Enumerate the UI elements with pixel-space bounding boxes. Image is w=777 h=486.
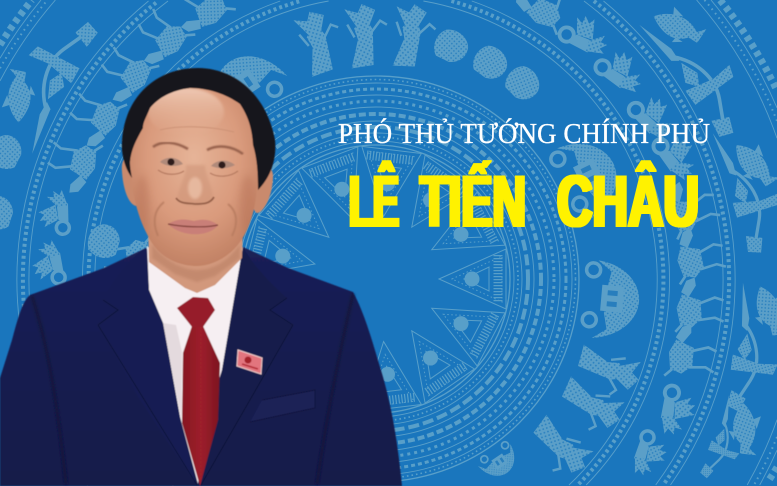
right lapel <box>201 247 293 486</box>
name: CHÂU <box>557 162 699 242</box>
hair <box>122 68 275 190</box>
eyebrows <box>153 143 243 154</box>
mouth <box>168 219 218 234</box>
breast pocket <box>250 390 315 422</box>
left eye <box>160 158 183 166</box>
subtitle: PHÓ THỦ TƯỚNG CHÍNH PHỦ <box>338 117 710 150</box>
drum inner concentric rings <box>242 75 580 481</box>
collar shading <box>163 323 182 417</box>
tie knot <box>177 297 215 327</box>
right cheek shadow <box>240 178 254 228</box>
shirt <box>147 246 243 484</box>
necktie <box>177 297 220 486</box>
drum inner figures: boats and winged dancers <box>86 2 645 485</box>
name <box>349 162 699 242</box>
nose highlight <box>188 177 202 199</box>
left lapel <box>98 248 197 486</box>
facial features <box>153 127 243 236</box>
neck <box>148 228 243 293</box>
right eye <box>211 161 235 168</box>
lapel outline shading <box>98 298 293 485</box>
left ear <box>122 158 140 206</box>
forehead wrinkles <box>160 127 234 132</box>
eye wrinkles <box>158 170 238 176</box>
name: LÊ <box>349 162 399 242</box>
name: TIẾN <box>420 162 526 242</box>
jacket sleeve seams <box>32 294 353 484</box>
face <box>130 84 258 266</box>
smile lines <box>155 202 236 236</box>
title block <box>338 117 710 242</box>
right ear <box>252 167 273 213</box>
neck shadow <box>152 244 240 282</box>
drum star triangles <box>243 146 506 412</box>
portrait of Lê Tiến Châu <box>0 68 402 486</box>
nose shadow <box>178 165 213 206</box>
left cheek shadow <box>136 178 150 226</box>
tie blade <box>182 326 220 486</box>
suit jacket <box>0 247 402 486</box>
forehead highlight <box>148 88 224 136</box>
party flag pin <box>237 350 262 374</box>
nose base <box>176 197 214 204</box>
